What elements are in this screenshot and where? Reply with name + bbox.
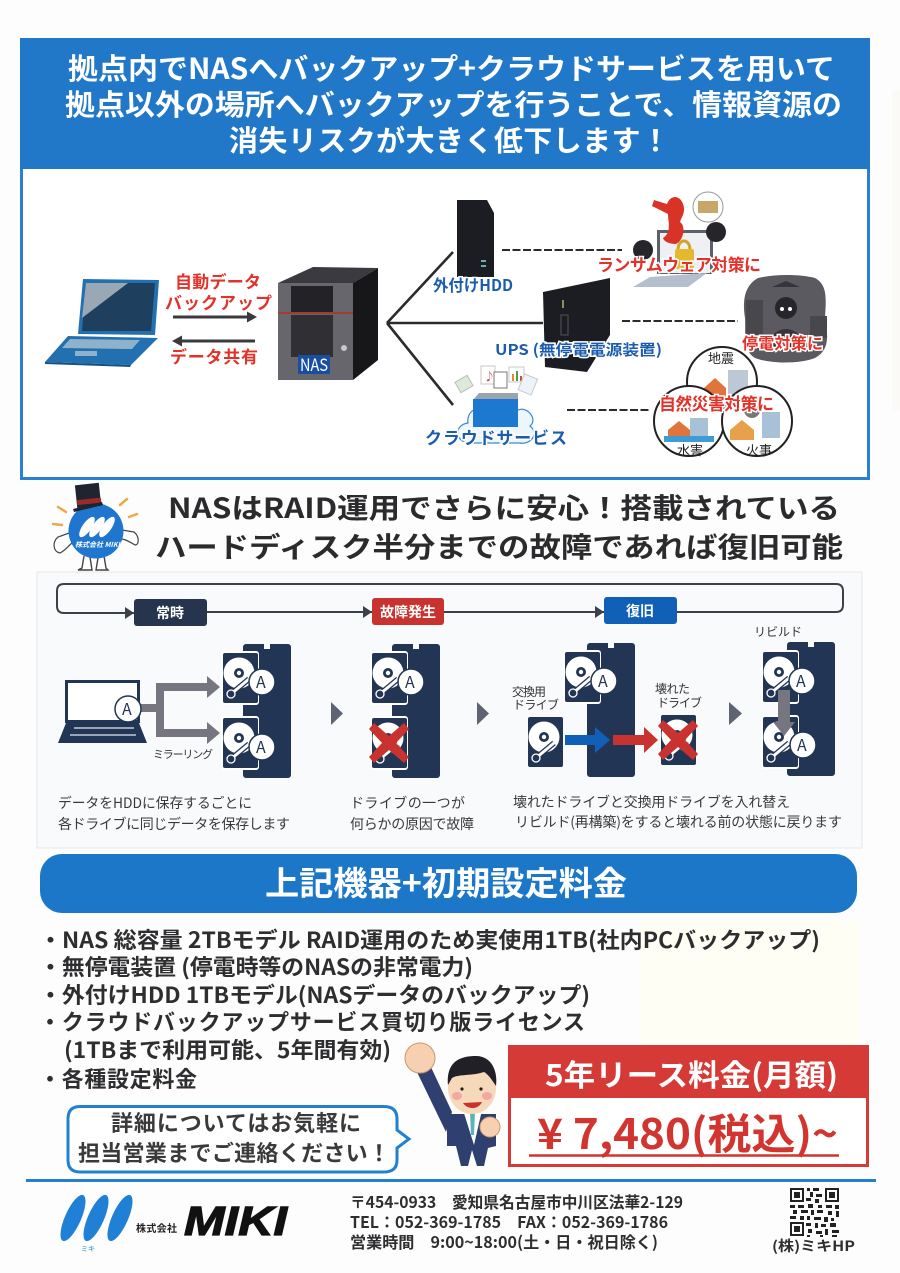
label: auto data backup: バックアップ xyxy=(165,289,272,314)
NAS rebuild xyxy=(761,642,835,776)
icon: spare drive xyxy=(528,717,563,767)
logo: MIKI xyxy=(56,1192,289,1254)
logo: MIKI: ミキ xyxy=(81,1244,95,1254)
caption: failure: 何らかの原因で故障 xyxy=(350,814,474,834)
step: always: 常時 xyxy=(156,603,184,623)
panel: RAID diagram xyxy=(37,572,862,848)
caption: always: データをHDDに保存するごとに xyxy=(58,793,252,813)
label: mirroring: ミラーリング xyxy=(153,746,213,762)
list: included items: ・無停電装置 (停電時等のNASの非常電力) xyxy=(39,950,473,982)
label: spare drive xyxy=(512,683,559,713)
icon: UPS device xyxy=(543,278,610,372)
mascot: MIKI: 株式会社 MIKI xyxy=(75,540,121,550)
caption: failure xyxy=(350,793,474,834)
heading: RAID xyxy=(155,487,843,566)
NAS replacement xyxy=(563,643,635,777)
label: UPS: UPS (無停電電源装置) xyxy=(495,339,662,360)
circle: fire: 火事 xyxy=(746,440,772,459)
banner: equipment and setup fee: 上記機器+初期設定料金 xyxy=(265,857,627,905)
icon: NAS device xyxy=(278,267,378,380)
icon: laptop normal xyxy=(58,682,147,743)
icon: ransomware xyxy=(633,192,726,287)
panel: price xyxy=(508,1045,869,1166)
step: failure xyxy=(372,598,444,625)
heading: RAID: ハードディスク半分までの故障であれば復旧可能 xyxy=(155,526,843,566)
price header xyxy=(508,1045,869,1098)
footer rule xyxy=(26,1179,876,1182)
icon: cloud service xyxy=(455,366,537,443)
icon: broken drive xyxy=(658,715,698,765)
step arrow xyxy=(477,702,489,725)
label: cloud service: クラウドサービス xyxy=(425,424,567,449)
label: spare drive: 交換用 xyxy=(512,683,546,700)
circle: earthquake: 地震 xyxy=(708,348,734,367)
step arrow xyxy=(331,702,343,725)
callout: contact: 担当営業までご連絡ください！ xyxy=(78,1136,390,1168)
icon: cloud service: ♪ xyxy=(484,368,495,384)
NAS replacement: A xyxy=(598,668,608,692)
arrow: red xyxy=(613,727,658,753)
title xyxy=(65,46,842,160)
step arrow xyxy=(729,702,742,725)
icon: NAS device: NAS xyxy=(300,351,328,376)
label: ransomware: ランサムウェア対策に xyxy=(597,251,761,276)
heading: RAID: NASはRAID運用でさらに安心！搭載されている xyxy=(168,487,840,527)
arrow: share to laptop xyxy=(172,336,255,346)
NAS failure xyxy=(369,644,440,778)
logo: MIKI: 株式会社 xyxy=(136,1220,177,1235)
illustration: businessman xyxy=(405,1043,500,1166)
panel: top backup overview xyxy=(20,38,870,478)
company address xyxy=(350,1189,683,1253)
label: auto data backup: 自動データ xyxy=(175,268,261,293)
list: included items: ・各種設定料金 xyxy=(39,1062,197,1094)
mascot: MIKI xyxy=(53,483,138,570)
label: broken drive xyxy=(655,680,702,711)
QR code xyxy=(790,1188,839,1237)
company address: 営業時間 9:00~18:00(土・日・祝日除く) xyxy=(350,1229,658,1253)
icon: external HDD xyxy=(457,200,494,277)
NAS normal xyxy=(221,644,291,778)
label: natural disasters: 自然災害対策に xyxy=(659,390,774,415)
caption: failure: ドライブの一つが xyxy=(350,793,465,813)
label: spare drive: ドライブ xyxy=(513,696,559,713)
connector lines xyxy=(387,252,543,405)
panel: price: 5年リース料金(月額) xyxy=(545,1051,838,1095)
title: 拠点以外の場所へバックアップを行うことで、情報資源の xyxy=(65,82,842,124)
step: recovery: 復旧 xyxy=(626,601,654,621)
list: included items: ・クラウドバックアップサービス買切り版ライセンス xyxy=(39,1005,585,1037)
logo: MIKI: MIKI xyxy=(184,1198,289,1244)
caption: always: 各ドライブに同じデータを保存します xyxy=(58,814,290,834)
label: external HDD: 外付けHDD xyxy=(433,272,513,296)
icon: natural disasters xyxy=(654,347,792,459)
step: always xyxy=(134,599,207,626)
company address: TEL：052-369-1785 FAX：052-369-1786 xyxy=(350,1209,668,1233)
company address: 〒454-0933 愛知県名古屋市中川区法華2-129 xyxy=(350,1189,683,1213)
circle: flood: 水害 xyxy=(677,440,703,459)
title: 拠点内でNASへバックアップ+クラウドサービスを用いて xyxy=(68,46,835,88)
label: rebuild: リビルド xyxy=(754,623,802,640)
step: failure: 故障発生 xyxy=(380,602,436,622)
label: QR: (株)ミキHP xyxy=(772,1236,855,1256)
label: broken drive: 壊れた xyxy=(655,680,690,697)
NAS normal: A xyxy=(256,734,266,758)
caption: always xyxy=(58,793,290,834)
NAS failure: A xyxy=(405,669,415,693)
label: auto data backup xyxy=(165,268,272,314)
list: included items: ・外付けHDD 1TBモデル(NASデータのバックアップ) xyxy=(39,978,590,1010)
label: blackout: 停電対策に xyxy=(742,330,823,354)
price value: ¥ 7,480(税込)~ xyxy=(537,1101,838,1162)
NAS rebuild: A xyxy=(796,668,806,692)
header band xyxy=(20,38,870,169)
data A on laptop: A xyxy=(122,696,132,720)
caption: recovery xyxy=(513,792,842,832)
data A on laptop xyxy=(115,696,141,722)
arrow: mirroring xyxy=(140,676,220,744)
callout: contact xyxy=(68,1106,409,1172)
NAS normal: A xyxy=(256,669,266,693)
list: included items: (1TBまで利用可能、5年間有効) xyxy=(64,1033,391,1065)
dashed connectors xyxy=(502,250,738,410)
list: included items: ・NAS 総容量 2TBモデル RAID運用のため実使用1TB(社内PCバックアップ) xyxy=(39,923,820,955)
caption: recovery: 壊れたドライブと交換用ドライブを入れ替え xyxy=(513,792,790,812)
label: broken drive: ドライブ xyxy=(657,694,702,711)
flow loop xyxy=(57,584,843,613)
arrow: blue xyxy=(565,727,610,753)
callout: contact: 詳細についてはお気軽に xyxy=(111,1106,361,1138)
icon: blackout xyxy=(744,275,827,362)
title: 消失リスクが大きく低下します！ xyxy=(229,118,670,160)
label: data share: データ共有 xyxy=(170,343,258,368)
arrow: backup to NAS xyxy=(173,312,257,322)
step: recovery xyxy=(604,597,677,624)
NAS rebuild: A xyxy=(797,732,807,756)
list: included items xyxy=(39,923,820,1094)
banner: equipment and setup fee xyxy=(40,854,857,913)
caption: recovery: リビルド(再構築)をすると壊れる前の状態に戻ります xyxy=(515,812,842,832)
icon: laptop xyxy=(45,279,159,367)
